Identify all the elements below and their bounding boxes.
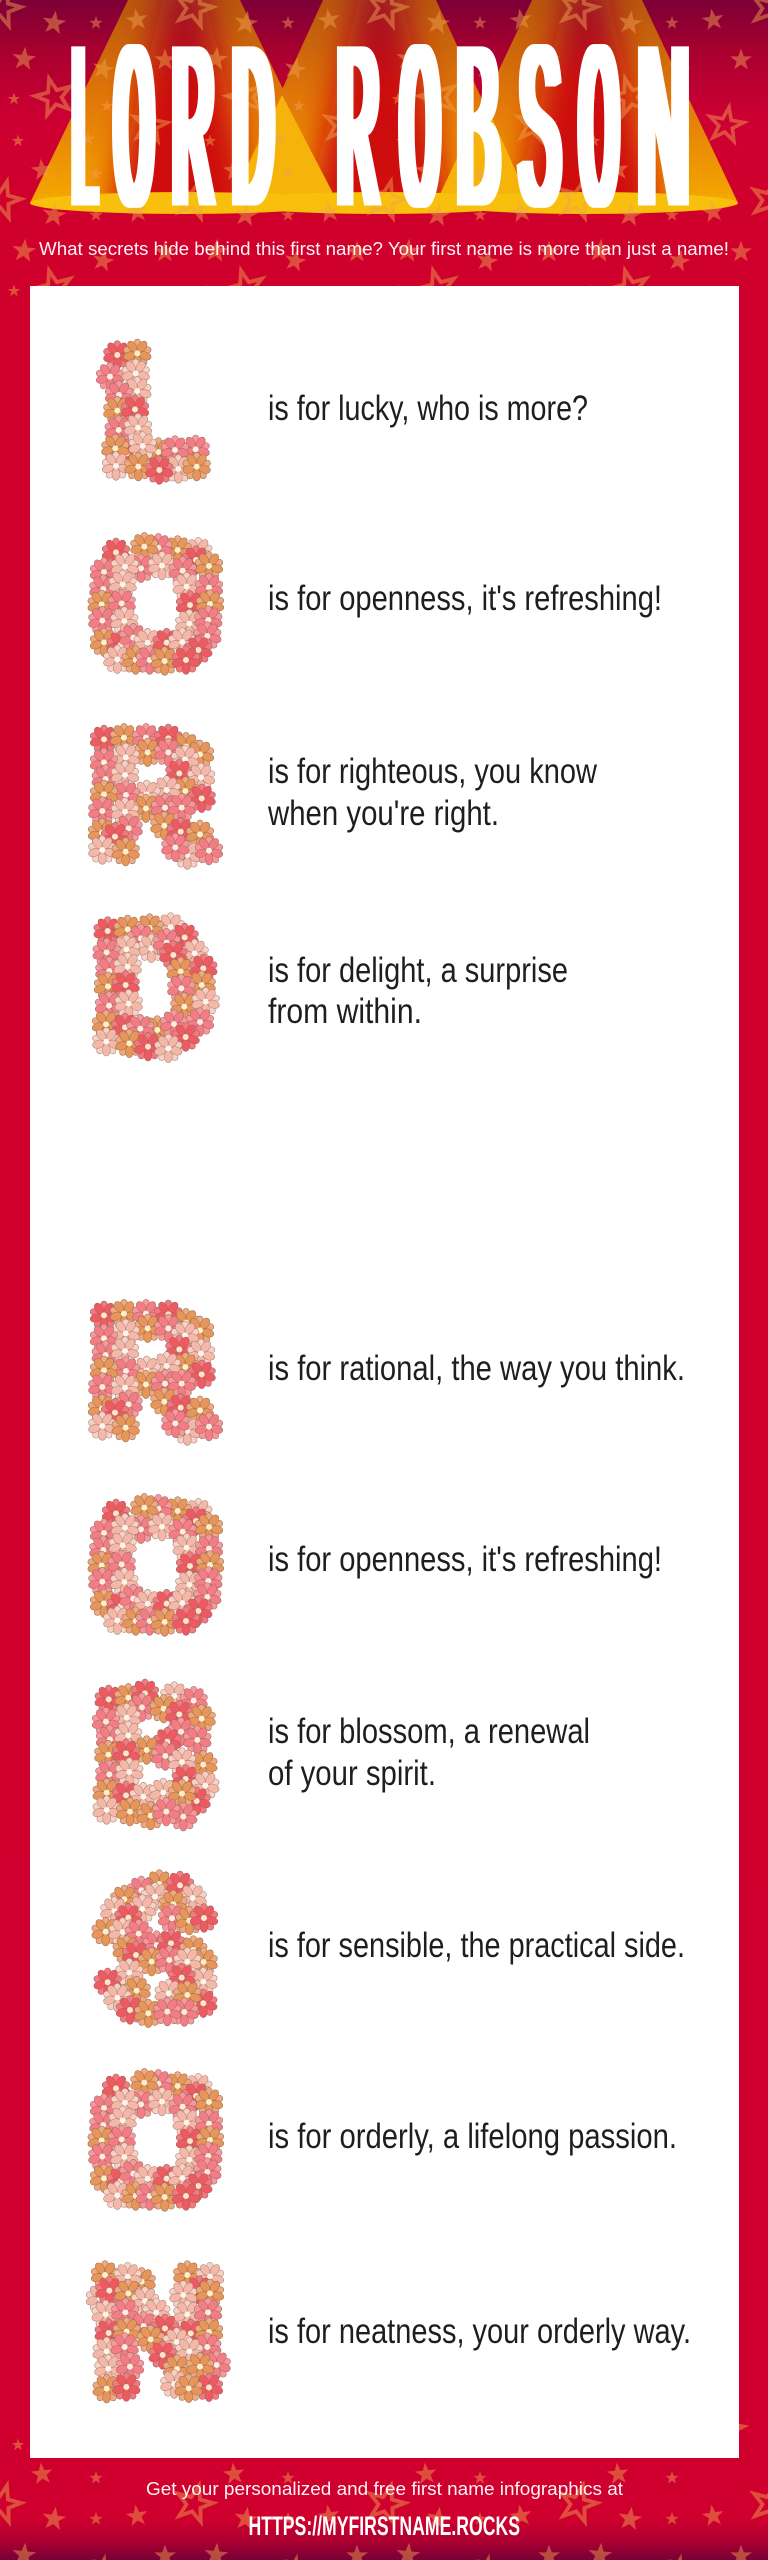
title: R xyxy=(336,7,378,278)
text: O: is for openness, it's refreshing! xyxy=(268,1540,662,1579)
icon: flower letter L xyxy=(95,339,212,484)
icon: flower letter S xyxy=(91,1870,219,2028)
text: L: is for lucky, who is more? xyxy=(268,389,588,428)
title: B xyxy=(456,7,499,278)
star pattern bottom band xyxy=(0,2410,768,2560)
title: O xyxy=(579,5,619,277)
row: S xyxy=(91,1870,685,2028)
row: L xyxy=(95,339,588,484)
title: S xyxy=(519,7,561,278)
subtitle: What secrets hide behind this first name? Your first name is more than just a name! xyxy=(39,238,729,259)
icon: flower letter O xyxy=(87,532,225,675)
row: R (Robson) xyxy=(87,1299,685,1445)
text: R xyxy=(267,752,598,833)
text: N: is for neatness, your orderly way. xyxy=(268,2312,691,2351)
row: O xyxy=(87,532,662,675)
icon: flower letter O xyxy=(87,2068,225,2211)
title: O xyxy=(400,5,440,277)
text: B: is for blossom, a renewal xyxy=(268,1712,590,1751)
icon: flower letter O xyxy=(87,1493,225,1636)
icon: flower letter R xyxy=(87,1299,224,1445)
title: O xyxy=(114,5,154,277)
icon: flower letter B xyxy=(91,1679,220,1831)
text: D: from within. xyxy=(268,992,422,1031)
title: L xyxy=(71,5,98,277)
row: O (third) xyxy=(87,2068,677,2211)
title: D xyxy=(231,7,274,278)
text: D: is for delight, a surprise xyxy=(268,951,568,990)
row: N xyxy=(85,2261,691,2403)
text: B: of your spirit. xyxy=(268,1754,436,1793)
star pattern top band xyxy=(0,0,768,300)
text: R: is for rational, the way you think. xyxy=(268,1349,685,1388)
icon: flower letter R xyxy=(87,723,224,869)
icon: flower letter D xyxy=(91,913,221,1063)
text: O: is for openness, it's refreshing! xyxy=(268,579,662,618)
row: B xyxy=(91,1679,590,1831)
row: O (Robson) xyxy=(87,1493,662,1636)
panel: letters xyxy=(30,286,739,2458)
spotlights header graphic xyxy=(20,0,750,225)
icon: flower letter N xyxy=(85,2261,232,2403)
row: R xyxy=(87,723,598,869)
row: D xyxy=(91,913,568,1063)
text: O: is for orderly, a lifelong passion. xyxy=(268,2117,677,2156)
text: R: is for righteous, you know xyxy=(268,752,598,791)
text: D xyxy=(268,951,568,1031)
text: S: is for sensible, the practical side. xyxy=(268,1926,685,1965)
text: R: when you're right. xyxy=(267,794,499,833)
text: B xyxy=(268,1712,590,1793)
title: N xyxy=(636,6,691,278)
footer text: Get your personalized and free first name infographics at xyxy=(146,2478,623,2499)
title xyxy=(71,5,691,278)
footer url: HTTPS://MYFIRSTNAME.ROCKS xyxy=(248,2511,520,2541)
title: R xyxy=(171,7,213,278)
